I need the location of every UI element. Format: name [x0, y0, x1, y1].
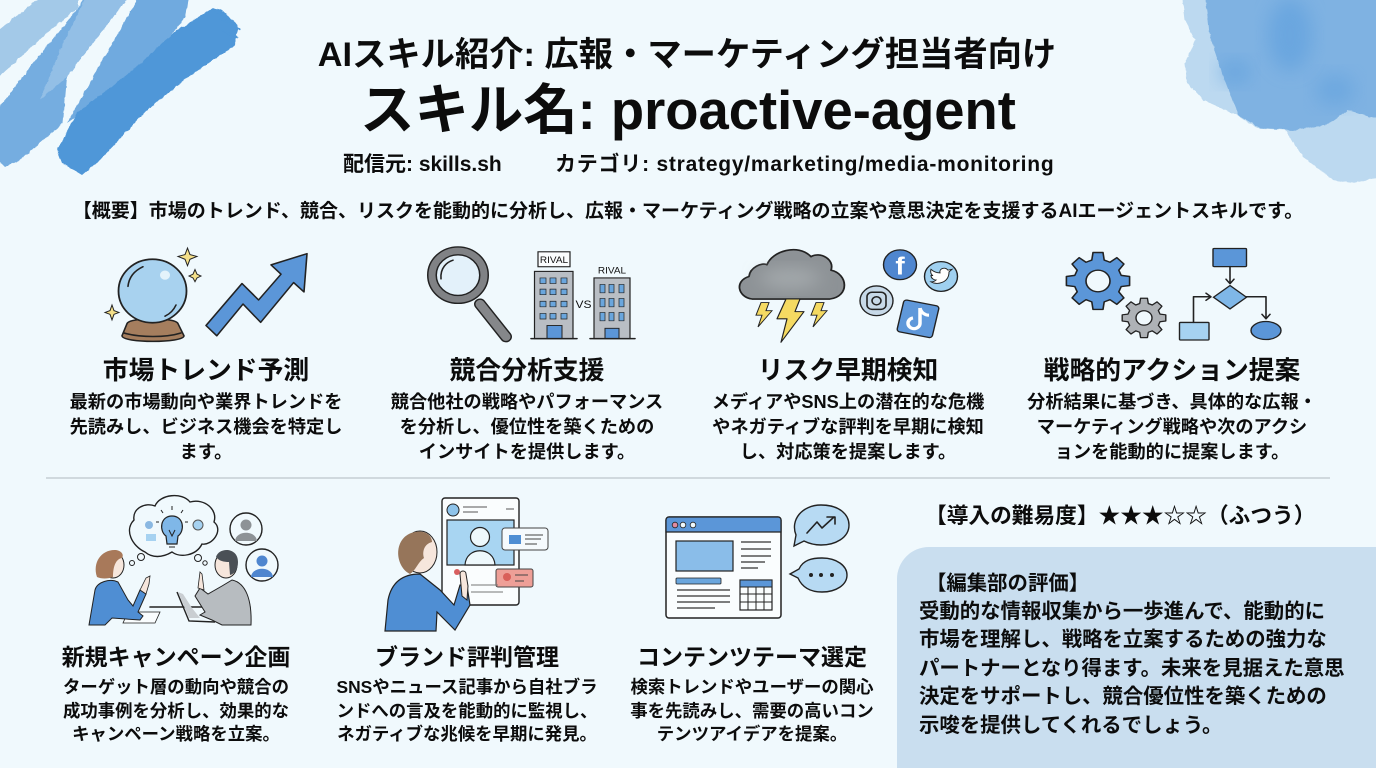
editorial review text: [919, 600, 1345, 737]
watercolor blob top right: [1182, 0, 1376, 183]
icon: gears: [1066, 253, 1166, 338]
description: [712, 392, 984, 462]
description: [337, 677, 597, 744]
editorial review text: 市場を理解し、戦略を立案するための強力な: [919, 629, 1327, 651]
panel: market trend forecast: [70, 357, 342, 462]
description: 先読みし、ビジネス機会を特定し: [70, 417, 342, 437]
description: ンドへの言及を能動的に監視し、: [337, 701, 597, 721]
description: ターゲット層の動向や競合の: [63, 677, 289, 697]
editorial review text: 受動的な情報収集から一歩進んで、能動的に: [919, 601, 1325, 623]
description: ネガティブな兆候を早期に発見。: [337, 724, 597, 744]
description: 最新の市場動向や業界トレンドを: [70, 392, 342, 412]
panel: new campaign planning: [62, 644, 290, 744]
description: やネガティブな評判を早期に検知: [712, 417, 984, 437]
editorial review text: 示唆を提供してくれるでしょう。: [919, 715, 1222, 737]
source: 配信元: skills.sh: [343, 153, 502, 176]
heading: 競合分析支援: [450, 357, 604, 385]
description: ョンを能動的に提案します。: [1055, 442, 1289, 462]
brush strokes top left: [0, 0, 240, 175]
icon: webpage with speech bubbles: [666, 505, 849, 618]
icon: social media badges: f: [895, 252, 905, 280]
icon: rival buildings: VS: [576, 298, 592, 311]
description: [1027, 392, 1317, 462]
description: ます。: [180, 442, 232, 462]
icon: crystal ball: [105, 248, 201, 341]
icon: person viewing social post: [385, 498, 548, 631]
description: インサイトを提供します。: [419, 442, 635, 462]
description: [630, 677, 874, 744]
heading: リスク早期検知: [758, 357, 938, 385]
icon: storm cloud: [739, 250, 844, 342]
editorial review text: 決定をサポートし、競合優位性を築くための: [919, 686, 1327, 708]
description: テンツアイデアを提案。: [657, 724, 847, 744]
heading: コンテンツテーマ選定: [637, 644, 867, 670]
title: AIスキル紹介: 広報・マーケティング担当者向け: [318, 36, 1056, 74]
panel: content theme selection: [630, 644, 874, 744]
description: 成功事例を分析し、効果的な: [63, 701, 289, 721]
description: を分析し、優位性を築くための: [400, 417, 654, 437]
editorial review text: パートナーとなり得ます。未来を見据えた意思: [919, 658, 1345, 680]
icon: rival buildings: [531, 252, 635, 339]
description: 事を先読みし、需要の高いコン: [630, 701, 874, 721]
category: カテゴリ: strategy/marketing/media-monitoring: [555, 153, 1054, 176]
description: し、対応策を提案します。: [740, 442, 956, 462]
heading: 戦略的アクション提案: [1044, 357, 1300, 385]
panel: competitor analysis: [391, 357, 663, 462]
panel: early risk detection: [712, 357, 984, 462]
description: [391, 392, 663, 462]
icon: magnifying glass: [432, 251, 506, 337]
panel: brand reputation management: [337, 644, 597, 744]
description: キャンペーン戦略を立案。: [72, 724, 280, 744]
icon: rising arrow: [206, 254, 307, 336]
description: マーケティング戦略や次のアクシ: [1037, 417, 1307, 437]
heading: 市場トレンド予測: [103, 357, 309, 385]
description: [63, 677, 289, 744]
skill name heading: スキル名: proactive-agent: [360, 80, 1016, 141]
description: 検索トレンドやユーザーの関心: [630, 677, 874, 697]
heading: 新規キャンペーン企画: [62, 644, 290, 670]
icon: flowchart: [1180, 249, 1281, 340]
editorial review heading: 【編集部の評価】: [926, 573, 1089, 595]
icon: rival buildings: RIVAL: [540, 255, 569, 266]
description: SNSやニュース記事から自社ブラ: [337, 677, 597, 697]
description: [70, 392, 342, 462]
overview: 【概要】市場のトレンド、競合、リスクを能動的に分析し、広報・マーケティング戦略の立案や意思決定を支援するAIエージェントスキルです。: [73, 201, 1303, 222]
icon: rival buildings: RIVAL: [598, 266, 627, 276]
description: 競合他社の戦略やパフォーマンス: [391, 392, 663, 412]
difficulty rating: 【導入の難易度】★★★☆☆（ふつう）: [925, 503, 1315, 528]
icon: brainstorm meeting: [89, 496, 278, 625]
icon: social media badges: [860, 250, 958, 338]
description: 分析結果に基づき、具体的な広報・: [1027, 392, 1317, 412]
heading: ブランド評判管理: [375, 644, 559, 670]
description: メディアやSNS上の潜在的な危機: [712, 392, 984, 412]
panel: editorial review background: [897, 547, 1376, 768]
panel: strategic action proposals: [1027, 357, 1317, 462]
